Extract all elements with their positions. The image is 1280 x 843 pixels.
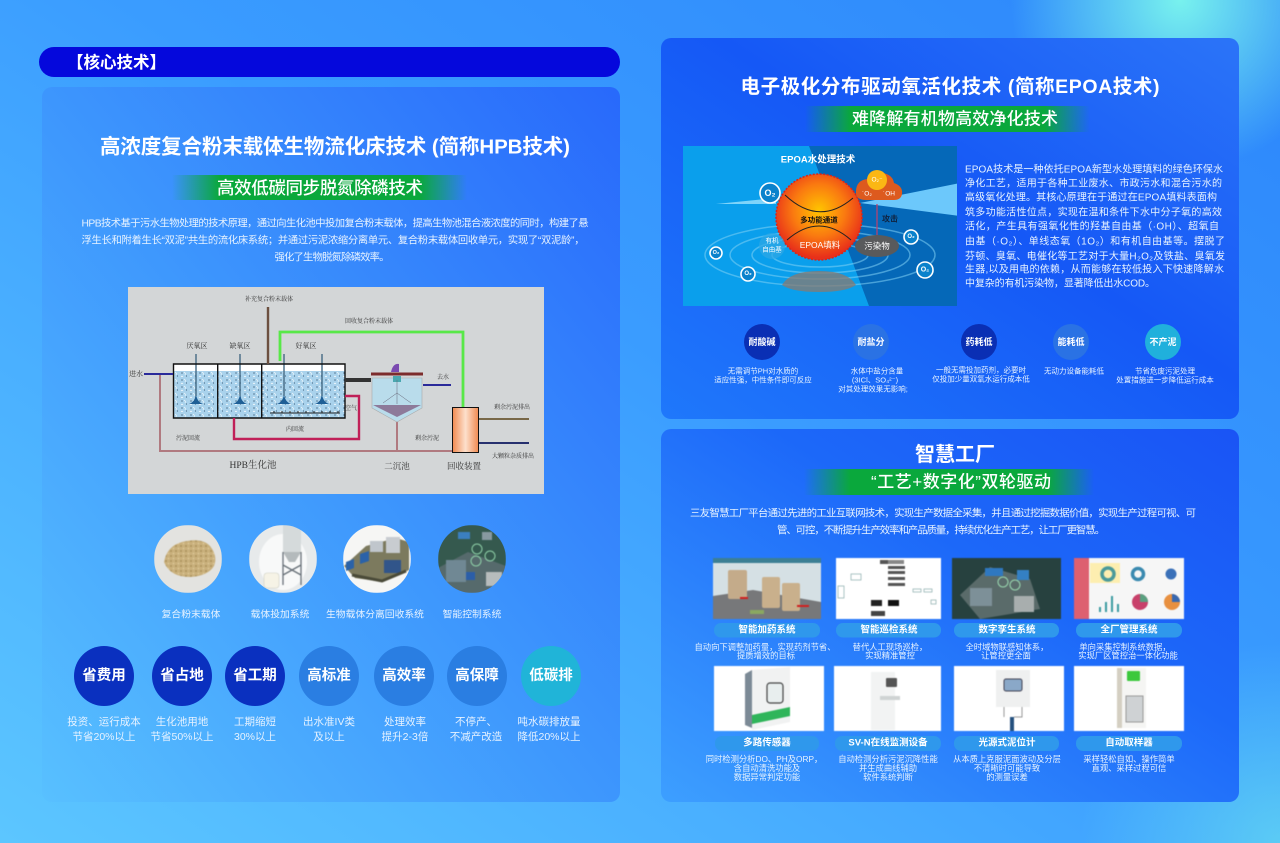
feature: low energy use bbox=[1044, 324, 1104, 376]
feature: salt resistant: 水体中盐分含量 bbox=[851, 366, 904, 376]
feature: acid and alkali resistant: 适应性强，中性条件即可反应 bbox=[714, 374, 812, 384]
card: light source mud level meter bbox=[953, 666, 1064, 782]
photo: carrier dosing system bbox=[249, 525, 317, 593]
card: multi-channel sensor: 多路传感器 bbox=[743, 736, 791, 748]
cloud: radicals: ˙O₂ bbox=[862, 190, 872, 198]
card: intelligent inspection system: 智能巡检系统 bbox=[860, 624, 918, 636]
heading: HPB title: 高浓度复合粉末载体生物流化床技术 (简称HPB技术) bbox=[100, 134, 570, 158]
heading bar: core technology: 【核心技术】 bbox=[67, 52, 166, 72]
diagram labels: 剩余污泥排出 bbox=[494, 403, 530, 411]
card: digital twin system: 全时域物联感知体系， bbox=[966, 642, 1048, 652]
benefit: saves time: 省工期 bbox=[233, 667, 277, 684]
heading bar: core technology bbox=[39, 47, 620, 77]
card: plant management system: 全厂管理系统 bbox=[1100, 624, 1158, 636]
benefit: saves time: 30%以上 bbox=[234, 731, 276, 743]
card: multi-channel sensor: 同时检测分析DO、PH及ORP， bbox=[706, 754, 822, 764]
card: digital twin system: 数字孪生系统 bbox=[978, 624, 1036, 636]
diagram labels: 缺氧区 bbox=[230, 341, 250, 350]
card: plant management system: 单向采集控制系统数据， bbox=[1079, 642, 1171, 652]
benefit: low carbon: 吨水碳排放量 bbox=[518, 715, 581, 728]
subtitle band: smart factory bbox=[804, 469, 1094, 495]
benefit: saves time bbox=[225, 646, 285, 743]
subtitle band: HPB: 高效低碳同步脱氮除磷技术 bbox=[217, 178, 423, 198]
feature: no sludge: 节省危废污泥处理 bbox=[1135, 366, 1195, 376]
panel: HPB technology bbox=[42, 87, 620, 802]
feature: acid and alkali resistant: 无需调节PH对水质的 bbox=[728, 366, 798, 376]
benefit: high efficiency: 提升2-3倍 bbox=[382, 730, 429, 743]
text block: HPB description: 浮生长和附着生长“双泥”共生的流化床系统；并通过污泥浓缩分离单元、复合粉末载体回收单元，实现了“双泥龄”， bbox=[82, 234, 584, 246]
benefit: saves cost: 省费用 bbox=[82, 667, 126, 684]
benefit: saves time: 工期缩短 bbox=[234, 715, 276, 728]
photo: intelligent control aerial bbox=[438, 525, 506, 593]
card: automatic sampler: 采样轻松自如、操作简单 bbox=[1083, 754, 1175, 764]
panel: EPOA technology bbox=[661, 38, 1239, 419]
feature: low reagent use: 仅投加少量双氧水运行成本低 bbox=[932, 374, 1030, 384]
text block: EPOA description: 筑多功能活性位点，实现在温和条件下水中分子氧的高效 bbox=[965, 206, 1222, 218]
oxygen labels: O₂ bbox=[764, 188, 776, 198]
feature: low reagent use: 一般无需投加药剂，必要时 bbox=[936, 364, 1026, 374]
benefit: saves cost: 节省20%以上 bbox=[72, 730, 136, 743]
heading: smart factory: 智慧工厂 bbox=[915, 443, 995, 466]
feature: low energy use: 能耗低 bbox=[1057, 336, 1085, 347]
card: intelligent dosing system: 自动向下调整加药量，实现药剂节省、 bbox=[694, 642, 836, 652]
diagram labels: HPB生化池 bbox=[230, 459, 277, 471]
diagram labels: 剩余污泥 bbox=[415, 434, 439, 442]
heading: EPOA title: 电子极化分布驱动氧活化技术 (简称EPOA技术) bbox=[740, 76, 1160, 98]
card: plant management system bbox=[1074, 558, 1184, 660]
text block: EPOA description: 活化，产生具有强氧化性的羟基自由基（·OH）、超氧自 bbox=[965, 220, 1219, 232]
feature: no sludge bbox=[1116, 324, 1214, 384]
card: SV-N online monitor: 自动检测分析污泥沉降性能 bbox=[838, 754, 938, 764]
diagram labels: 内回流 bbox=[286, 425, 304, 433]
benefit: saves cost: 投资、运行成本 bbox=[67, 715, 141, 728]
benefit: saves land: 节省50%以上 bbox=[150, 730, 214, 743]
photo labels bbox=[162, 608, 502, 620]
pill: pollutants bbox=[855, 235, 899, 257]
diagram labels bbox=[129, 295, 534, 471]
card: SV-N online monitor: 并生成曲线辅助 bbox=[859, 763, 917, 773]
text block: HPB description: 强化了生物脱氮除磷效率。 bbox=[274, 250, 390, 264]
oxygen labels: O₂ bbox=[921, 266, 929, 274]
card: SV-N online monitor: 软件系统判断 bbox=[863, 772, 913, 782]
diagram labels: 污泥回流 bbox=[176, 434, 200, 442]
benefit: low carbon: 低碳排 bbox=[529, 666, 573, 684]
diagram labels: 回收装置 bbox=[447, 461, 481, 471]
card: SV-N online monitor: SV-N在线监测设备 bbox=[848, 736, 928, 748]
photo labels: 载体投加系统 bbox=[251, 608, 310, 620]
feature: no sludge: 不产泥 bbox=[1149, 336, 1177, 347]
card: multi-channel sensor: 含自动清洗功能及 bbox=[734, 763, 800, 773]
card: intelligent dosing system bbox=[694, 558, 836, 660]
diagram labels: 补充复合粉末载体 bbox=[245, 295, 293, 303]
card: digital twin system: 让管控更全面 bbox=[981, 650, 1031, 660]
oxygen labels bbox=[713, 188, 929, 277]
text block: EPOA description: 由基（·O₂）、单线态氧（1O₂）和有机自由基等。摆脱了 bbox=[965, 234, 1225, 248]
oxygen labels: O₂ bbox=[907, 234, 915, 240]
diagram labels: 厌氧区 bbox=[186, 341, 208, 350]
photo labels: 生物载体分离回收系统 bbox=[326, 608, 424, 620]
feature: acid and alkali resistant bbox=[714, 324, 812, 384]
feature: acid and alkali resistant: 耐酸碱 bbox=[748, 336, 776, 347]
label: organic radical bbox=[759, 233, 785, 259]
benefit: high standard: 高标准 bbox=[307, 666, 351, 684]
illustration: EPOA water treatment: EPOA水处理技术 bbox=[781, 154, 856, 166]
feature: salt resistant bbox=[838, 324, 908, 394]
card: digital twin system bbox=[952, 558, 1061, 660]
diagram labels: 进水 bbox=[129, 369, 143, 378]
card: intelligent inspection system: 替代人工现场巡检， bbox=[853, 642, 927, 652]
subtitle band: EPOA bbox=[805, 106, 1090, 132]
diagram labels: 大颗粒杂质排出 bbox=[492, 452, 534, 460]
feature: salt resistant: (3ICl、SO₄²⁻) bbox=[852, 376, 899, 384]
photo labels: 复合粉末载体 bbox=[162, 608, 221, 620]
benefit: high efficiency bbox=[374, 646, 434, 743]
oxygen labels: O₂ bbox=[744, 271, 752, 277]
cloud: radicals: O₂⁻ bbox=[871, 176, 883, 184]
illustration: EPOA water treatment: 攻击 bbox=[882, 214, 898, 224]
tanks bbox=[174, 354, 345, 418]
benefit: saves cost bbox=[67, 646, 141, 743]
benefit: saves land: 省占地 bbox=[160, 667, 204, 684]
benefit: high assurance bbox=[447, 646, 507, 743]
process diagram: HPB flow bbox=[128, 287, 544, 494]
card: automatic sampler: 自动取样器 bbox=[1105, 736, 1153, 748]
feature: salt resistant: 对其处理效果无影响; bbox=[838, 384, 908, 394]
card: light source mud level meter: 光源式泥位计 bbox=[978, 736, 1036, 748]
benefit: high standard bbox=[299, 646, 359, 743]
sphere: EPOA filler: 多功能通道 bbox=[800, 214, 838, 224]
diagram labels: 回收复合粉末载体 bbox=[345, 317, 393, 325]
text block: EPOA description: 芬顿、臭氧、电催化等工艺对于大量H₂O₂及铁盐、臭氧发 bbox=[965, 250, 1225, 262]
diagram labels: 好氧区 bbox=[296, 341, 316, 350]
text block: EPOA description bbox=[965, 162, 1225, 290]
card: plant management system: 实现厂区管控治一体化功能 bbox=[1078, 650, 1178, 660]
photo: carrier separation recovery system bbox=[343, 525, 411, 593]
benefit: low carbon: 降低20%以上 bbox=[517, 730, 581, 743]
benefit: saves land bbox=[150, 646, 214, 743]
text block: HPB description: HPB技术基于污水生物处理的技术原理，通过向生化池中投加复合粉末载体，提高生物池混合液浓度的同时，构建了悬 bbox=[82, 216, 588, 230]
diagram labels: 去水 bbox=[437, 373, 449, 381]
feature: no sludge: 处置措施进一步降低运行成本 bbox=[1116, 374, 1214, 384]
feature: low energy use: 无动力设备能耗低 bbox=[1044, 366, 1104, 376]
card: intelligent inspection system bbox=[836, 558, 941, 660]
card: light source mud level meter: 不清晰时可能导致 bbox=[974, 763, 1041, 773]
recovery unit bbox=[452, 408, 478, 452]
diagram labels: 二沉池 bbox=[384, 461, 410, 471]
photo: composite powder carrier bbox=[154, 525, 222, 593]
text block: HPB description bbox=[82, 216, 588, 264]
card: light source mud level meter: 的测量误差 bbox=[986, 772, 1028, 782]
cloud: radicals bbox=[856, 170, 902, 200]
text block: smart factory description: 管、可控，不断提升生产效率和产品质量，持续优化生产工艺，让工厂更智慧。 bbox=[777, 524, 1105, 536]
text block: smart factory description bbox=[690, 506, 1196, 536]
card: multi-channel sensor: 数据异常判定功能 bbox=[734, 772, 800, 782]
benefit: high assurance: 高保障 bbox=[455, 666, 499, 684]
diagram labels: 空气 bbox=[345, 404, 357, 412]
benefit: low carbon bbox=[517, 646, 581, 743]
card: automatic sampler: 直观、采样过程可信 bbox=[1092, 763, 1166, 773]
text block: EPOA description: 中复杂的有机污染物，显著降低出水COD。 bbox=[965, 276, 1155, 290]
benefit: high assurance: 不停产、 bbox=[455, 715, 497, 728]
clarifier bbox=[371, 364, 423, 422]
cloud: radicals: ˙OH bbox=[883, 190, 895, 198]
label: organic radical: 有机 bbox=[766, 236, 779, 244]
oxygen bubbles bbox=[710, 183, 933, 281]
benefit: high standard: 出水准IV类 bbox=[303, 715, 355, 728]
feature: salt resistant: 耐盐分 bbox=[857, 336, 885, 347]
pipes bbox=[144, 307, 529, 451]
feature: low reagent use: 药耗低 bbox=[965, 336, 993, 347]
text block: EPOA description: 高级氧化处理。其核心原理在于通过在EPOA填料表面构 bbox=[965, 190, 1217, 204]
text block: smart factory description: 三友智慧工厂平台通过先进的工业互联网技术，实现生产数据全采集，并且通过挖掘数据价值，实现生产过程可视、可 bbox=[690, 506, 1196, 520]
label: organic radical: 自由基 bbox=[762, 244, 782, 254]
panel: smart factory bbox=[661, 429, 1239, 802]
benefit: high assurance: 不减产改造 bbox=[450, 730, 503, 743]
text block: EPOA description: EPOA技术是一种依托EPOA新型水处理填料的绿色环保水 bbox=[965, 162, 1223, 176]
feature: low reagent use bbox=[932, 324, 1030, 384]
photo labels: 智能控制系统 bbox=[443, 608, 502, 620]
sphere: EPOA filler bbox=[776, 174, 862, 260]
subtitle band: EPOA: 难降解有机物高效净化技术 bbox=[852, 110, 1058, 128]
benefit: high standard: 及以上 bbox=[313, 731, 345, 743]
subtitle band: HPB bbox=[172, 175, 467, 200]
benefit: saves land: 生化池用地 bbox=[156, 715, 209, 728]
card: intelligent dosing system: 提质增效的目标 bbox=[737, 650, 795, 660]
card: automatic sampler bbox=[1074, 666, 1184, 773]
subtitle band: smart factory: “工艺+数字化”双轮驱动 bbox=[871, 472, 1051, 492]
oxygen labels: O₂ bbox=[713, 250, 720, 256]
sphere: EPOA filler: EPOA填料 bbox=[800, 240, 841, 250]
pill: pollutants: 污染物 bbox=[864, 241, 890, 251]
benefit: high efficiency: 高效率 bbox=[382, 666, 426, 684]
text block: EPOA description: 净化工艺，适用于各种工业废水、市政污水和混合污水的 bbox=[965, 176, 1222, 190]
card: SV-N online monitor bbox=[834, 666, 941, 782]
card: intelligent inspection system: 实现精准管控 bbox=[865, 650, 915, 660]
benefit: high efficiency: 处理效率 bbox=[384, 715, 426, 728]
text block: EPOA description: 生器,以及用电的依赖，从而能够在较低投入下快速降解水 bbox=[965, 262, 1224, 276]
card: multi-channel sensor bbox=[706, 666, 824, 782]
card: light source mud level meter: 从本质上克服泥面波动及分层 bbox=[953, 754, 1061, 764]
card: intelligent dosing system: 智能加药系统 bbox=[738, 624, 796, 636]
illustration: EPOA water treatment bbox=[683, 146, 960, 306]
